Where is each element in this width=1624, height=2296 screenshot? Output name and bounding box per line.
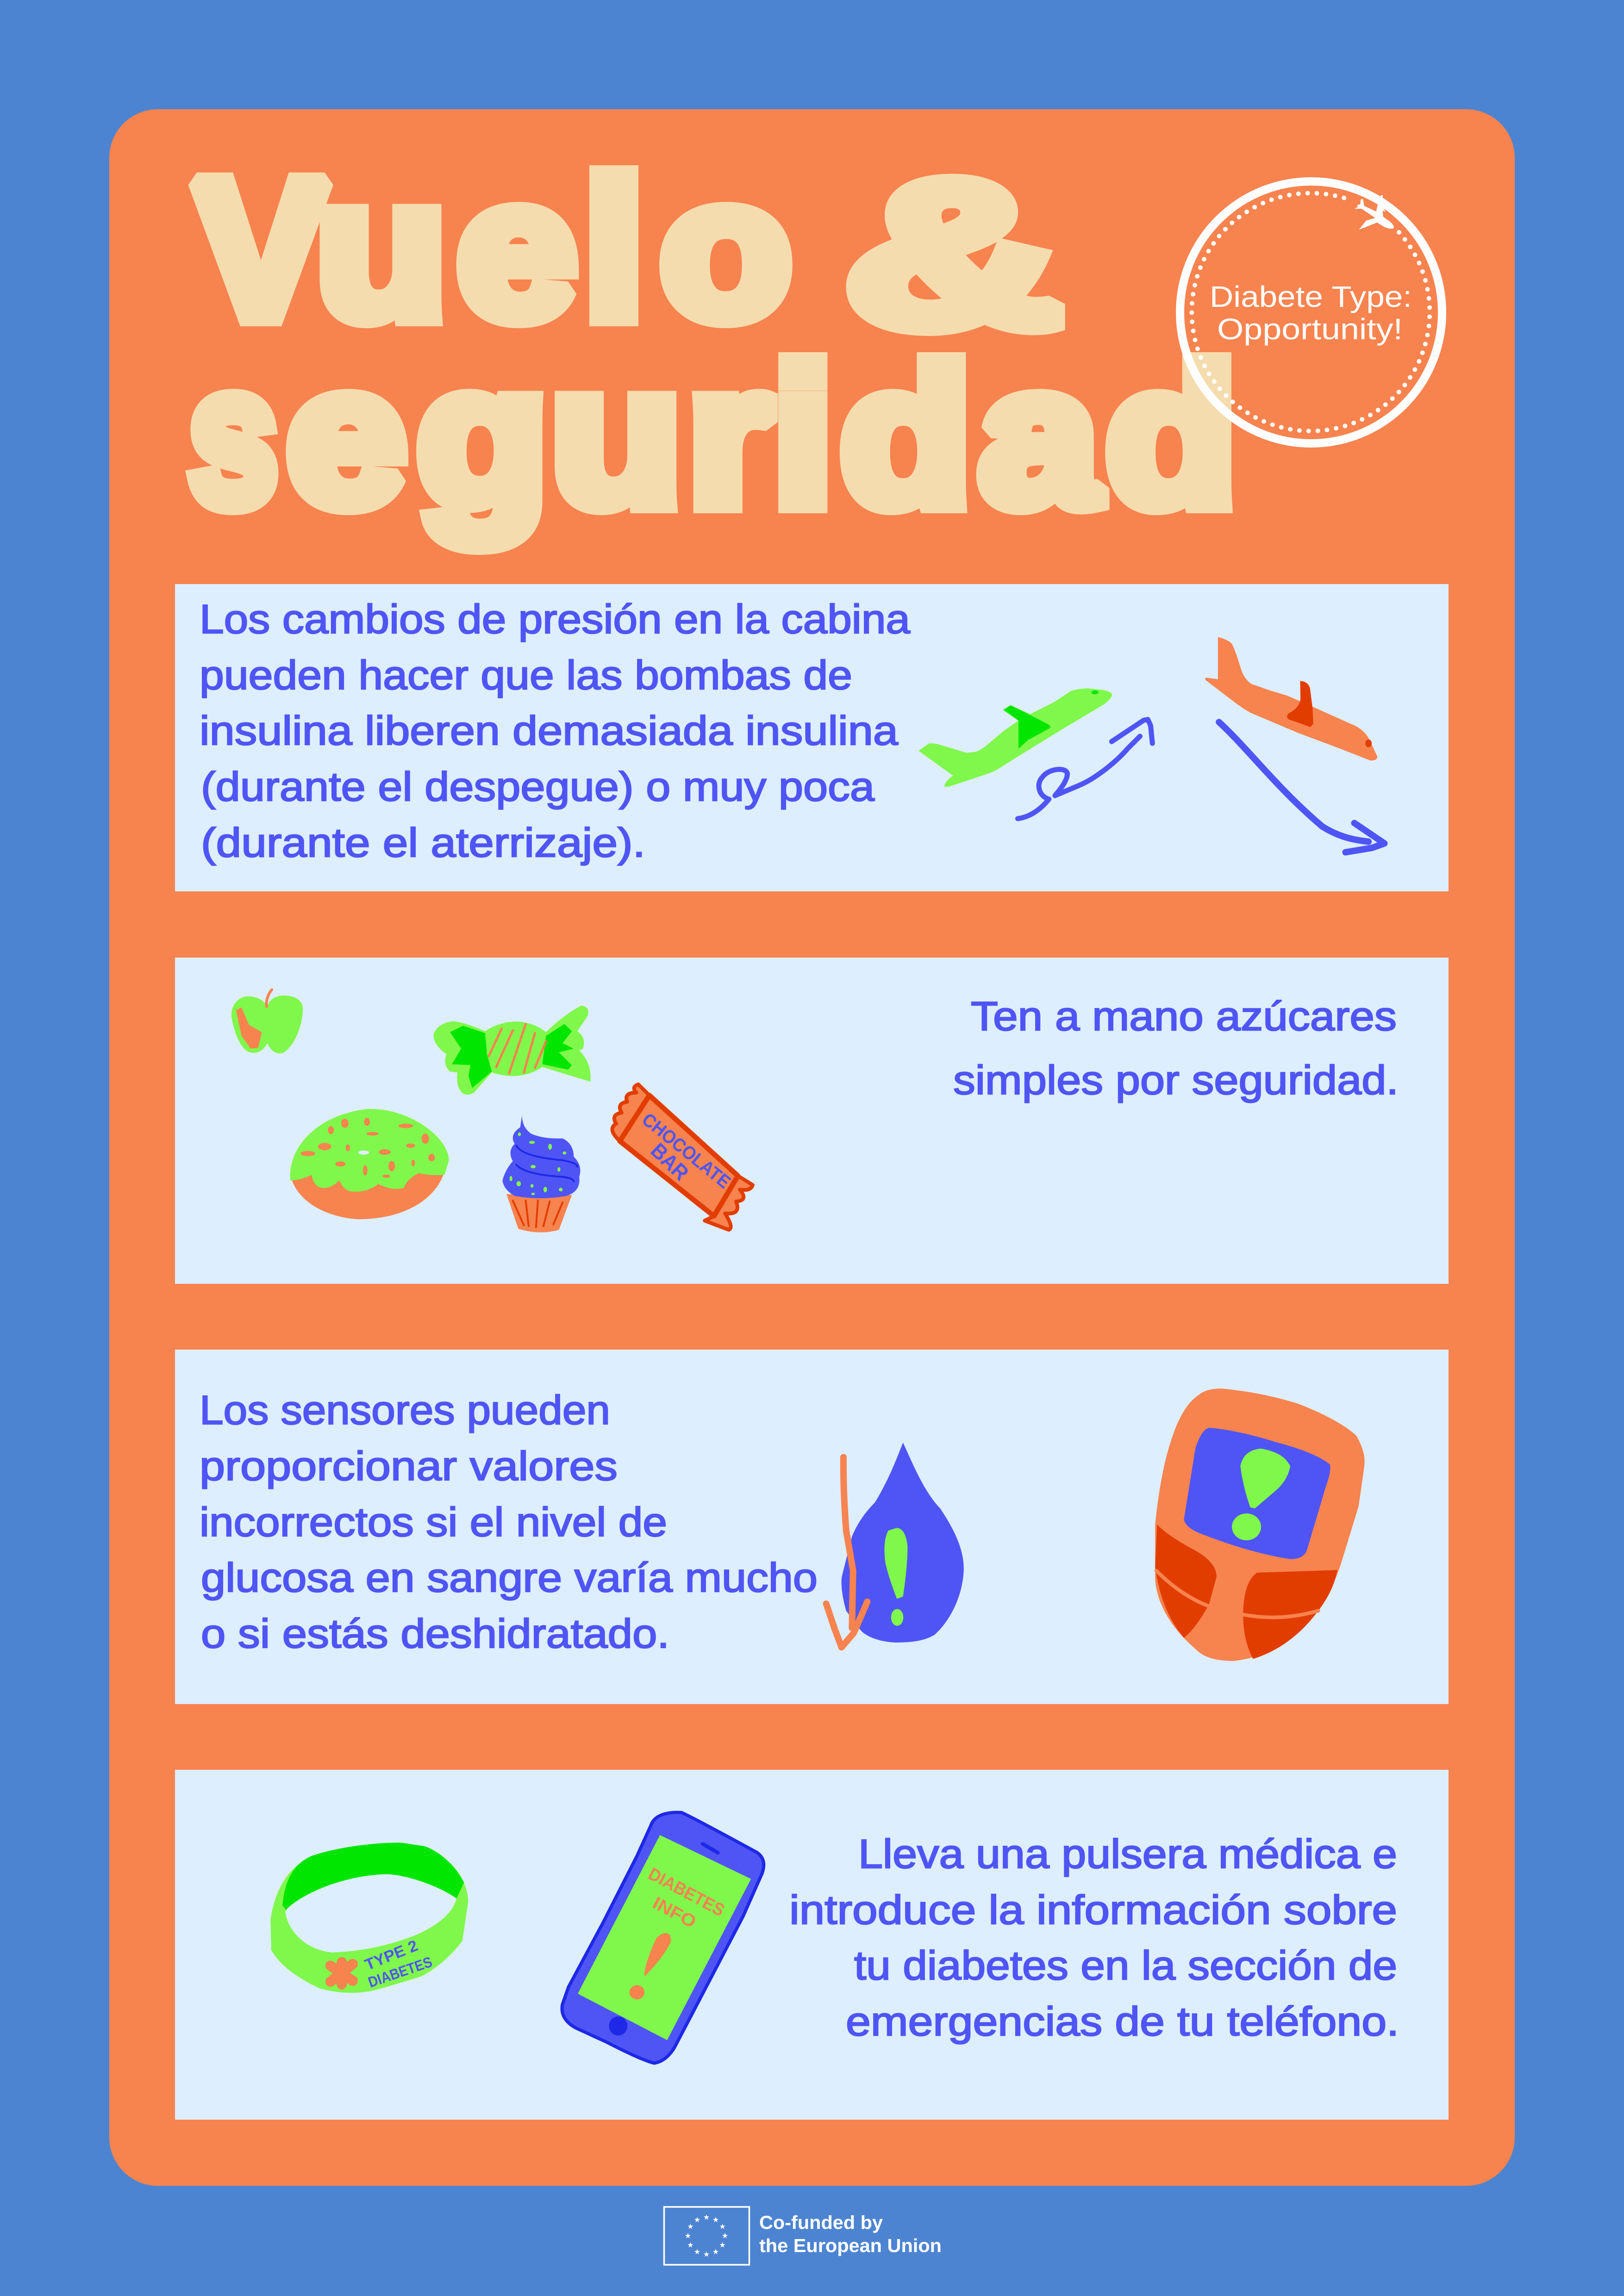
badge: Diabete Type Opportunity [1180,181,1442,443]
footer text: the European Union [759,2235,942,2256]
phone label: DIABETES [645,1864,728,1921]
footer: EU co-funding logo [664,2207,942,2265]
text block 2: Ten a mano azúcares [971,993,1397,1039]
text block 4: Lleva una pulsera médica e [858,1831,1397,1877]
icons: bracelet and phone [270,1812,764,2063]
icon: phone [562,1812,764,2063]
text block 3: proporcionar valores [200,1443,618,1489]
icon: blood drop [842,1443,964,1643]
text block 1: (durante el despegue) o muy poca [201,764,874,809]
text block 3: o si estás deshidratado. [201,1611,669,1656]
footer text [759,2212,942,2256]
text block 3: Los sensores pueden [200,1387,610,1433]
icon: EU flag [664,2207,749,2265]
panel 3: sensores [175,1350,1449,1704]
bracelet label: DIABETES [366,1953,434,1991]
badge: Diabete Type Opportunity: Opportunity! [1217,312,1403,346]
icon: small plane [1354,195,1394,230]
bracelet label: TYPE 2 [362,1937,420,1974]
icon: cupcake [502,1115,580,1232]
text block 4 [789,1831,1399,2044]
text block 3 [200,1387,818,1656]
text block 1: pueden hacer que las bombas de [200,652,852,698]
arrow: down [1219,722,1385,852]
text block 1: Los cambios de presión en la cabina [200,596,910,642]
title: uelo [317,139,791,359]
arrow: up [1018,719,1152,819]
icon: chocolate bar wrapper [612,1084,753,1230]
chocolate bar label: CHOCOLATE [638,1109,734,1193]
text block 4: emergencias de tu teléfono. [846,1998,1399,2044]
chocolate bar label: BAR [646,1138,693,1185]
icons: drop and meter [826,1388,1365,1661]
text block 4: tu diabetes en la sección de [854,1942,1397,1988]
arrow: glucose down [826,1457,867,1647]
icon: orange plane [1205,637,1377,760]
text block 1 [200,596,910,865]
title [189,138,1236,547]
icon: bracelet [270,1842,468,1993]
text block 3: glucosa en sangre varía mucho [201,1555,818,1600]
bracelet label [362,1937,434,1991]
icon: candy [433,1006,591,1095]
footer text: Co-funded by [759,2212,883,2233]
title: eguridad [287,326,1236,547]
panel 1: presion en cabina [175,584,1449,891]
panel 2: azucares [175,958,1449,1284]
icon: planes and arrows [918,637,1385,852]
title: V [195,139,327,359]
badge: Diabete Type Opportunity: Diabete Type: [1210,280,1412,313]
panel 4: pulsera y telefono [175,1770,1449,2120]
text block 1: insulina liberen demasiada insulina [200,708,898,753]
text block 1: (durante el aterrizaje). [201,820,645,865]
title: s [189,326,277,546]
text block 4: introduce la información sobre [789,1887,1397,1933]
icon: green plane [918,689,1112,787]
main orange card [109,109,1515,2186]
phone label: INFO [650,1893,700,1932]
icon: apple [231,990,303,1053]
text block 2 [953,993,1399,1103]
icon: donut [290,1109,449,1219]
text block 3: incorrectos si el nivel de [200,1499,667,1545]
icons: sweets [231,990,753,1232]
title: & [845,138,1062,369]
text block 2: simples por seguridad. [953,1057,1399,1103]
icon: glucose meter [1155,1388,1365,1661]
